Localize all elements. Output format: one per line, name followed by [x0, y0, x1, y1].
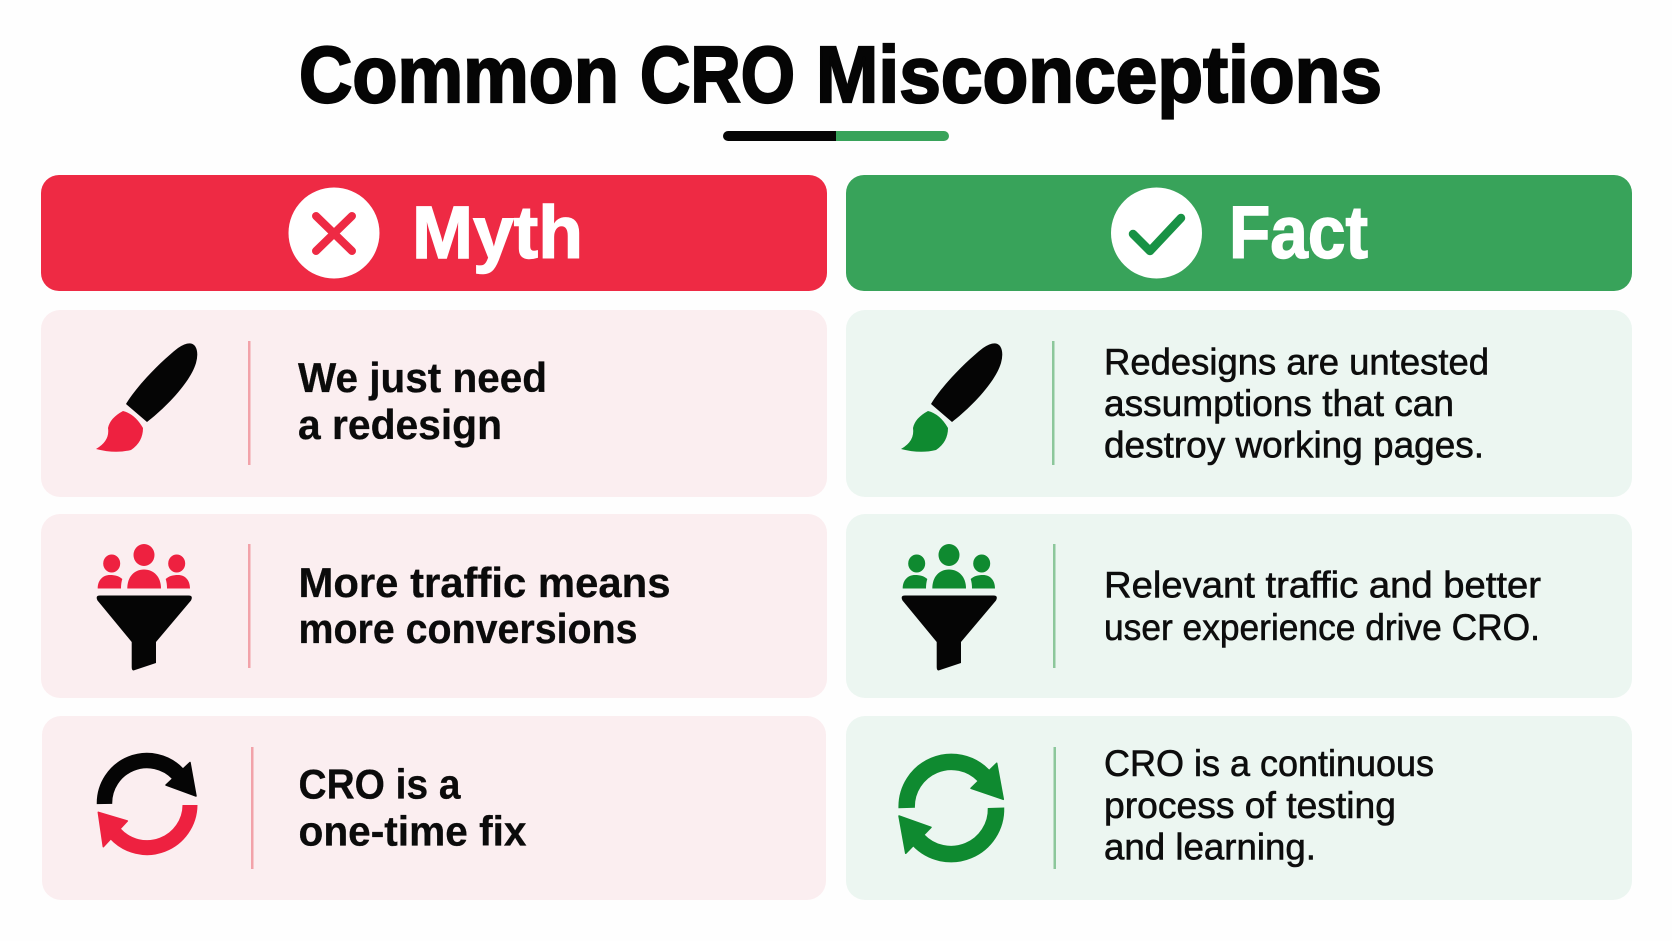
fact text 2: Relevant traffic and better — [1104, 564, 1541, 606]
panel: fact row 3 — [846, 716, 1632, 900]
fact text 3: and learning. — [1104, 826, 1316, 868]
fact text 2 — [1104, 564, 1541, 648]
panel: fact row 1 — [846, 310, 1632, 497]
fact text 2: user experience drive CRO. — [1104, 607, 1540, 648]
icon: paintbrush red — [96, 343, 197, 452]
title — [299, 30, 1382, 119]
fact text 1 — [1104, 342, 1489, 466]
myth text 2: More traffic means — [298, 559, 670, 606]
fact text 3: process of testing — [1104, 785, 1396, 826]
myth text 3 — [298, 760, 527, 854]
fact text 3: CRO is a continuous — [1104, 743, 1434, 784]
icon: paintbrush green — [901, 343, 1002, 452]
panel: myth header — [41, 175, 827, 291]
icon: refresh arrows black and red — [98, 761, 196, 848]
icon: cross in circle — [288, 188, 380, 278]
fact text 3 — [1104, 743, 1434, 868]
myth text 1: We just need — [298, 354, 547, 401]
panel: myth row 2 — [41, 514, 827, 698]
myth text 2: more conversions — [298, 605, 638, 652]
icon: refresh arrows green — [899, 762, 1003, 854]
title underline — [723, 131, 949, 141]
fact text 1: Redesigns are untested — [1104, 342, 1489, 382]
title: Common — [299, 30, 619, 119]
icon: check in circle — [1111, 188, 1202, 278]
title: Misconceptions — [816, 30, 1382, 119]
panel: myth row 1 — [41, 310, 827, 497]
panel: myth row 3 — [42, 716, 826, 900]
icon: people over funnel green — [902, 544, 997, 670]
myth text 1 — [298, 354, 547, 448]
myth text 2 — [298, 559, 670, 652]
panel: fact row 2 — [846, 514, 1632, 698]
fact heading: Fact — [1229, 191, 1368, 274]
fact text 1: destroy working pages. — [1104, 424, 1484, 466]
panel: fact header — [846, 175, 1632, 291]
myth text 3: one-time fix — [298, 808, 527, 854]
fact text 1: assumptions that can — [1104, 383, 1454, 424]
icon: people over funnel red — [97, 544, 192, 670]
title: CRO — [640, 30, 795, 119]
myth text 1: a redesign — [298, 401, 502, 448]
myth heading: Myth — [412, 191, 583, 274]
myth text 3: CRO is a — [298, 760, 461, 808]
